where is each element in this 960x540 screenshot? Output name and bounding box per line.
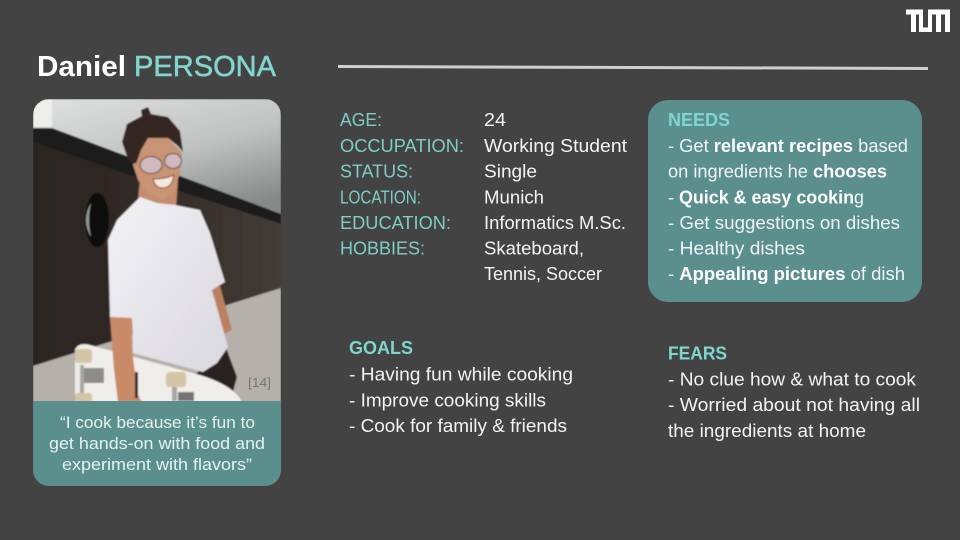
goals list: - Improve cooking skills (349, 390, 546, 410)
photo: hair (122, 107, 183, 164)
quote text: experiment with flavors” (62, 456, 252, 474)
photo: ledge (33, 128, 281, 224)
fears heading: FEARS (668, 342, 727, 364)
profile labels: OCCUPATION: (340, 136, 464, 156)
photo: dark wooden wall (33, 128, 281, 366)
photo: t-shirt (108, 197, 228, 372)
needs list: - Appealing pictures of dish (668, 263, 905, 284)
title: PERSONA (134, 51, 277, 83)
quote text: “I cook because it’s fun to (60, 414, 255, 432)
profile values: Munich (484, 186, 544, 208)
fears list: - Worried about not having all (668, 394, 920, 415)
needs heading: NEEDS (668, 109, 730, 130)
profile values: Tennis, Soccer (484, 263, 602, 284)
goals list: - Cook for family & friends (349, 415, 567, 436)
photo: face (132, 136, 182, 183)
fears list (668, 368, 920, 441)
photo: glasses (140, 154, 182, 174)
photo: round window (85, 193, 109, 247)
title (37, 51, 277, 83)
quote text (49, 414, 265, 474)
fears list: the ingredients at home (668, 420, 866, 441)
profile labels: EDUCATION: (340, 213, 451, 233)
profile labels: STATUS: (340, 162, 413, 182)
profile labels: HOBBIES: (340, 238, 425, 258)
goals block (349, 337, 573, 436)
photo: left arm (110, 317, 142, 402)
goals heading: GOALS (349, 337, 413, 358)
photo: skateboard (75, 344, 241, 405)
needs list: - Get suggestions on dishes (668, 212, 900, 233)
photo: shorts (195, 345, 237, 392)
needs list: on ingredients he chooses (668, 160, 887, 182)
logo: TUM (906, 10, 950, 32)
profile values: Skateboard, (484, 238, 584, 258)
profile labels: AGE: (340, 110, 382, 130)
photo: neck (138, 180, 178, 208)
profile labels: LOCATION: (340, 188, 421, 208)
quote text: get hands-on with food and (49, 435, 265, 453)
photo: wheels (75, 349, 92, 363)
goals list (349, 364, 573, 436)
profile values: Working Student (484, 135, 627, 156)
photo: trucks (80, 365, 84, 400)
header rule (338, 66, 928, 68)
photo: smile (153, 175, 174, 188)
photo: board lettering (135, 372, 138, 398)
photo: white corner (33, 99, 52, 127)
needs list: - Quick & easy cooking (668, 186, 864, 208)
photo credit: [14] (248, 376, 271, 390)
profile values: 24 (484, 109, 506, 130)
profile values: Single (484, 160, 537, 182)
goals list: - Having fun while cooking (349, 364, 573, 384)
panel: persona photo (33, 99, 281, 405)
needs list: - Get relevant recipes based (668, 135, 908, 156)
panel: needs (648, 100, 922, 302)
profile values: Informatics M.Sc. (484, 212, 626, 233)
profile values (484, 109, 627, 284)
title: Daniel (37, 51, 126, 83)
photo: right arm (212, 286, 232, 335)
needs list: - Healthy dishes (668, 238, 805, 258)
profile labels (340, 110, 464, 258)
panel: quote (33, 401, 281, 486)
photo: upper wall (33, 99, 281, 215)
fears list: - No clue how & what to cook (668, 368, 917, 390)
needs list (668, 135, 908, 284)
fears block (668, 342, 920, 441)
photo: ground (33, 280, 281, 405)
